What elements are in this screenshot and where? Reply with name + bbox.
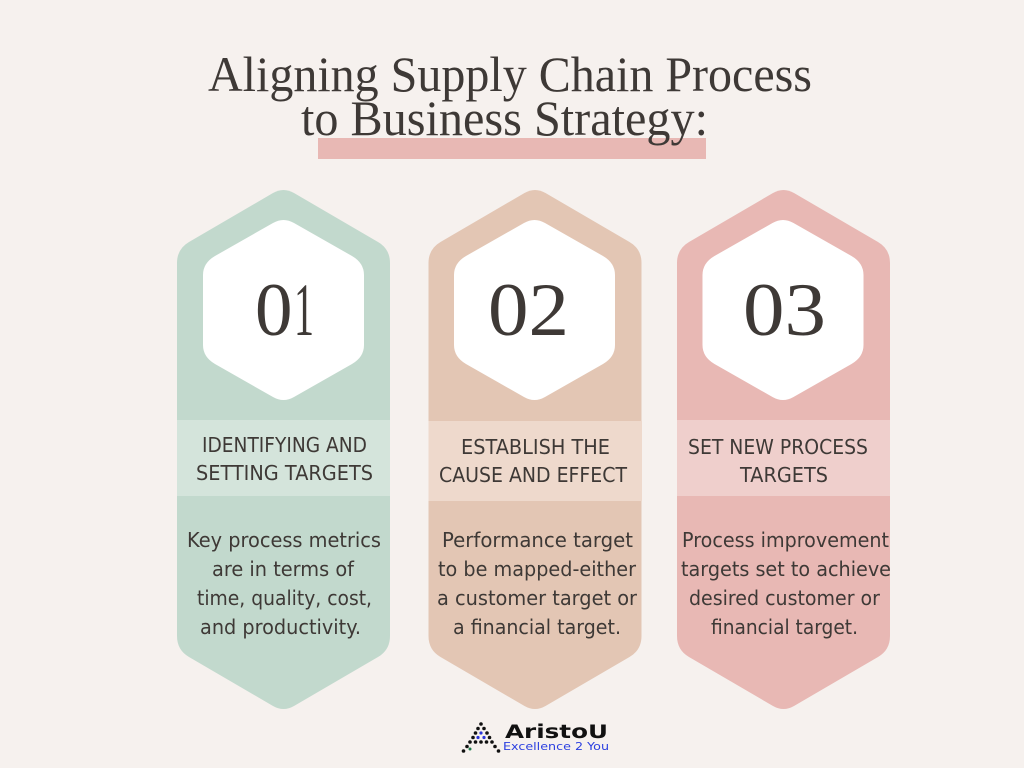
logo tagline: Excellence 2 You: [503, 740, 609, 753]
heading: [439, 435, 627, 487]
panel shape pink: [677, 190, 890, 709]
white hexagon: [702, 220, 864, 400]
panel: step 01: [177, 190, 390, 709]
description: to be mapped-either: [438, 557, 637, 581]
logo name: AristoU: [505, 722, 608, 743]
heading: CAUSE AND EFFECT: [439, 463, 627, 487]
title line 2: to Business Strategy:: [301, 90, 708, 146]
description: [681, 528, 891, 639]
panel: step 03: [677, 190, 891, 709]
panel: step 02: [428, 190, 642, 709]
panel shape tan: [428, 190, 642, 709]
description: are in terms of: [212, 557, 355, 581]
heading band: [177, 420, 390, 496]
description: Performance target: [442, 528, 633, 552]
heading: SET NEW PROCESS: [688, 435, 868, 459]
heading: IDENTIFYING AND: [202, 433, 367, 457]
heading: [688, 435, 868, 487]
heading: [196, 433, 373, 485]
title: [208, 46, 812, 159]
number 02: 02: [488, 269, 569, 352]
white hexagon: [454, 220, 615, 400]
title highlight bar: [318, 138, 706, 159]
number 03: 03: [743, 269, 826, 352]
logo: AristoU: [462, 722, 609, 753]
panel shape green: [177, 190, 390, 709]
description: [187, 528, 381, 639]
white hexagon: [203, 220, 364, 400]
description: desired customer or: [689, 586, 881, 610]
description: a customer target or: [437, 586, 638, 610]
description: financial target.: [711, 615, 858, 639]
heading: TARGETS: [739, 463, 828, 487]
number 01: 0: [255, 269, 292, 352]
description: Key process metrics: [187, 528, 381, 552]
heading: SETTING TARGETS: [196, 461, 373, 485]
description: and productivity.: [200, 615, 361, 639]
icon: dotted triangle: [462, 722, 500, 753]
heading band: [677, 420, 890, 496]
number 01: [255, 269, 314, 352]
heading: ESTABLISH THE: [461, 435, 610, 459]
heading band: [428, 421, 642, 501]
title line 1: Aligning Supply Chain Process: [208, 46, 812, 102]
description: a financial target.: [453, 615, 621, 639]
description: Process improvement: [682, 528, 889, 552]
description: targets set to achieve: [681, 557, 891, 581]
number 01: 1: [294, 269, 314, 352]
description: [437, 528, 638, 639]
description: time, quality, cost,: [197, 586, 372, 610]
